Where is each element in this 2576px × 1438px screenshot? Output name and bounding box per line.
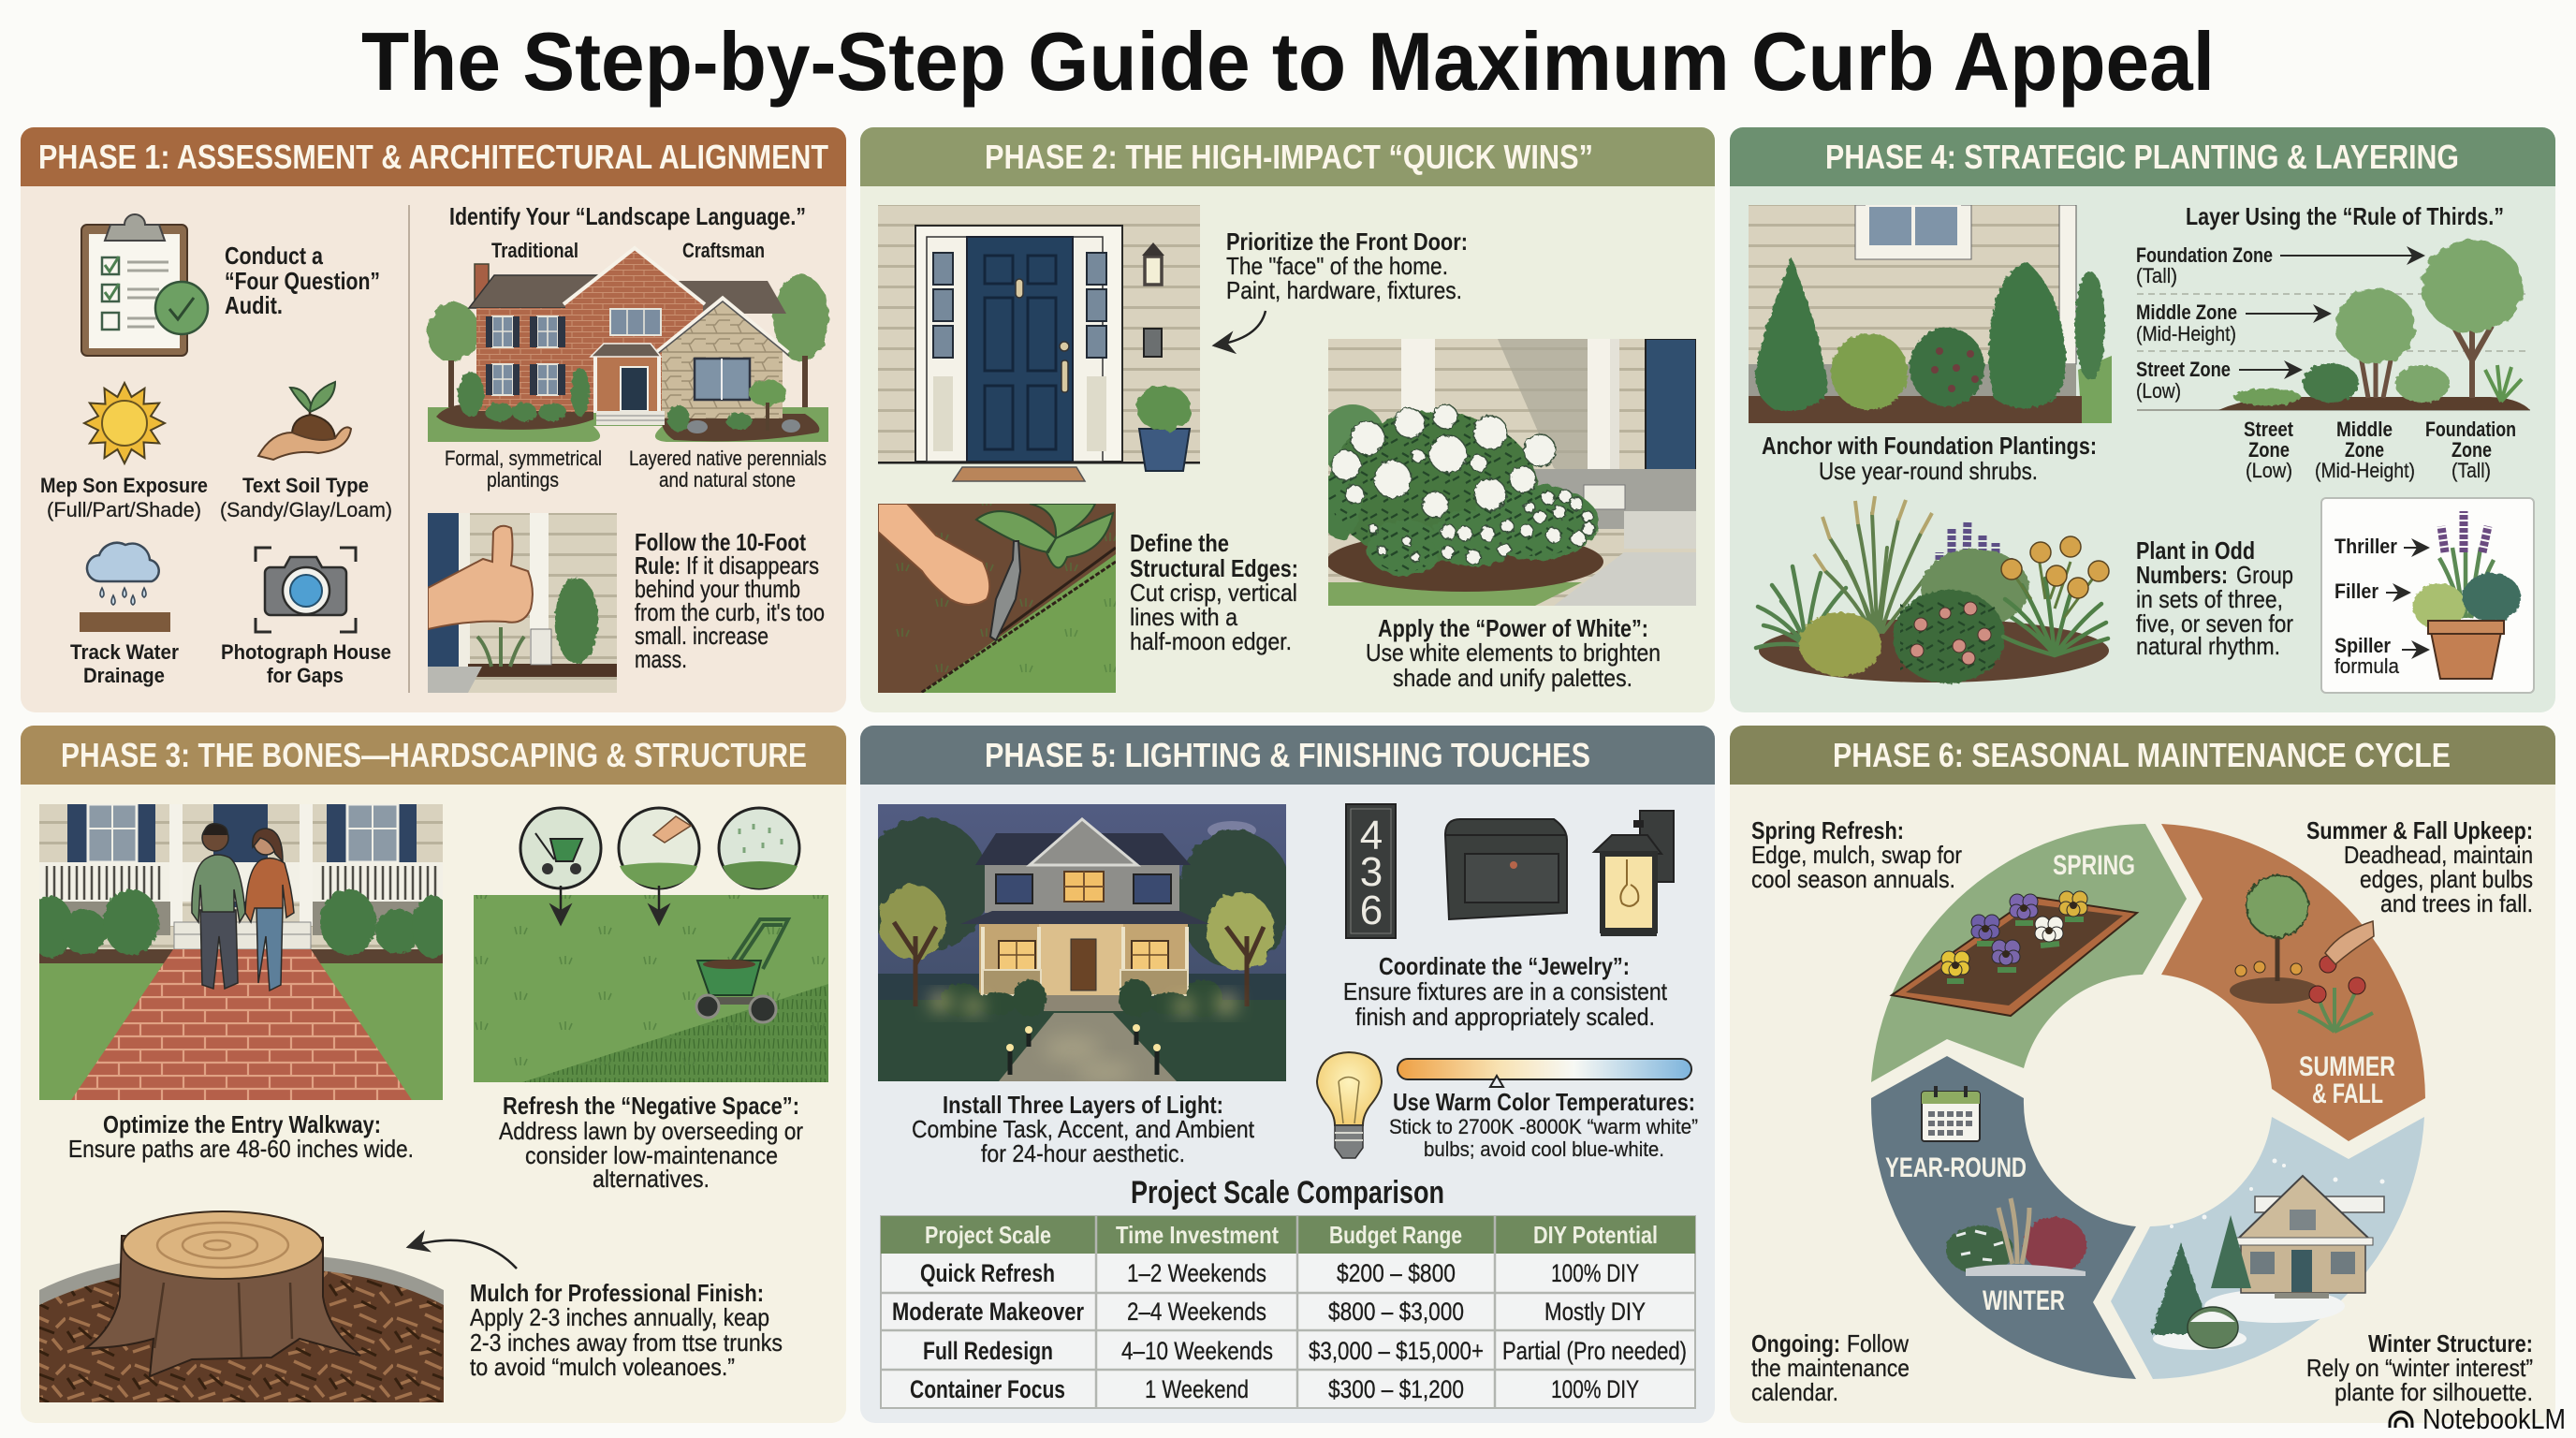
text: sun exposure <box>40 474 208 521</box>
text: three layers: Install Three Layers of Light: <box>943 1091 1223 1119</box>
panel: phase 1 assessment <box>21 127 846 712</box>
text: spring refresh: cool season annuals. <box>1751 865 1955 893</box>
text: mulch finish: Mulch for Professional Finish: <box>470 1279 764 1307</box>
text: audit: Audit. <box>225 291 283 319</box>
icon: house number plaque: 6 <box>1360 888 1383 933</box>
segment: summer and fall <box>2161 824 2425 1141</box>
phase 1 header: PHASE 1: ASSESSMENT & ARCHITECTURAL ALIGNMENT <box>38 138 828 176</box>
illustration: front door <box>878 205 1200 481</box>
text: summer and fall upkeep: and trees in fall. <box>2380 889 2533 917</box>
text: negative space <box>499 1092 803 1193</box>
text: winter structure: plante for silhouette. <box>2334 1378 2533 1406</box>
text: odd numbers: Plant in Odd <box>2136 536 2255 565</box>
table: project scale comparison: $3,000 – $15,000+ <box>1309 1337 1484 1365</box>
text: drainage: Drainage <box>83 664 165 687</box>
text: summer and fall upkeep: edges, plant bulbs <box>2360 865 2533 893</box>
text: entry walkway <box>68 1110 414 1163</box>
illustration: foundation shrubs <box>1749 205 2112 423</box>
text: winter structure: Rely on “winter interest” <box>2306 1354 2533 1382</box>
text: 10-foot rule <box>635 528 825 673</box>
table: project scale comparison: Budget Range <box>1329 1221 1462 1249</box>
text: soil type: Text Soil Type <box>242 474 369 497</box>
panel: phase 5 lighting <box>858 726 1715 1423</box>
panel: phase 6 seasonal cycle <box>1730 726 2555 1423</box>
phase 6 header <box>1730 726 2555 785</box>
labels: zone names left: Street Zone <box>2136 358 2231 381</box>
text: ongoing <box>1751 1329 1910 1406</box>
text: drainage <box>70 640 179 687</box>
text: mulch finish: to avoid “mulch voleanoes.” <box>470 1353 735 1381</box>
text: front door: Paint, hardware, fixtures. <box>1226 276 1462 304</box>
text: power of white <box>1366 614 1661 692</box>
text: front door: Prioritize the Front Door: <box>1226 227 1468 256</box>
text: spring refresh: Spring Refresh: <box>1751 816 1904 844</box>
text: drainage: Track Water <box>70 640 179 664</box>
callout: thriller filler spiller <box>2321 498 2534 693</box>
segment: year-round: WINTER <box>1983 1285 2065 1316</box>
segment: summer and fall: & FALL <box>2312 1078 2383 1109</box>
caption: layered: and natural stone <box>659 468 796 492</box>
label: craftsman: Craftsman <box>682 239 765 262</box>
text: soil type <box>220 474 392 521</box>
text: 10-foot rule: Rule: <box>635 551 681 580</box>
text: structural edges: Define the <box>1130 529 1229 557</box>
text: warm colour temperatures: bulbs; avoid cool blue-white. <box>1424 1137 1664 1161</box>
labels: zone names left: Foundation Zone <box>2136 243 2273 267</box>
labels: zone names below: (Tall) <box>2452 459 2491 482</box>
text: soil type: (Sandy/Glay/Loam) <box>220 498 392 521</box>
icon: camera <box>256 548 356 632</box>
phase 4 header: PHASE 4: STRATEGIC PLANTING & LAYERING <box>1825 138 2459 176</box>
segment: spring <box>1871 824 2187 1082</box>
text: odd numbers: in sets of three, <box>2136 585 2283 613</box>
text: negative space: Address lawn by overseeding or <box>499 1117 803 1145</box>
text: ongoing: Follow <box>1847 1329 1909 1357</box>
text: front door: The "face" of the home. <box>1226 252 1448 280</box>
diagram: rule of thirds zones <box>2137 240 2530 410</box>
text: spring refresh <box>1751 816 1962 893</box>
text: photograph: Photograph House <box>221 640 391 664</box>
heading: rule of thirds: Layer Using the “Rule of Thirds.” <box>2186 202 2504 230</box>
panel: phase 2 quick wins <box>860 127 1715 712</box>
phase 5 header <box>860 726 1715 785</box>
text: entry walkway: Ensure paths are 48-60 inches wide. <box>68 1135 414 1163</box>
text: mulch finish <box>470 1279 783 1381</box>
text: three layers: for 24-hour aesthetic. <box>981 1139 1185 1167</box>
table: project scale comparison: DIY Potential <box>1533 1221 1658 1249</box>
text: structural edges <box>1130 529 1298 655</box>
text: audit: “Four Question” <box>225 267 380 295</box>
text: audit: Conduct a <box>225 242 323 270</box>
caption: layered: Layered native perennials <box>629 447 827 470</box>
text: front door <box>1226 227 1468 304</box>
labels: zone names below: Zone <box>2248 438 2290 462</box>
icon: mailbox <box>1445 819 1567 919</box>
text: odd numbers: Group <box>2236 561 2293 589</box>
text: warm colour temperatures <box>1389 1088 1698 1161</box>
labels: zone names left: Middle Zone <box>2136 301 2237 324</box>
icon: soil in hand <box>258 382 351 460</box>
text: 10-foot rule: If it disappears <box>686 551 819 580</box>
icon: clipboard audit <box>81 214 208 356</box>
callout: thriller filler spiller: Thriller <box>2334 535 2397 558</box>
phase 5 header: PHASE 5: LIGHTING & FINISHING TOUCHES <box>985 736 1590 774</box>
text: power of white: Use white elements to brighten <box>1366 638 1661 667</box>
heading: project scale comparison: Project Scale Comparison <box>1131 1175 1444 1211</box>
labels: zone names left <box>2136 243 2273 403</box>
illustration: stump with mulch <box>39 1211 444 1402</box>
text: jewelry: finish and appropriately scaled. <box>1355 1003 1655 1031</box>
table: project scale comparison: 4–10 Weekends <box>1121 1337 1273 1365</box>
segment: spring: SPRING <box>2053 850 2135 881</box>
illustration: thumb test <box>428 513 617 693</box>
callout: thriller filler spiller: Filler <box>2334 580 2378 603</box>
heading: landscape language: Identify Your “Landscape Language.” <box>449 202 806 230</box>
text: audit <box>225 242 380 319</box>
table: project scale comparison: Time Investment <box>1116 1221 1279 1249</box>
table: project scale comparison: Mostly DIY <box>1544 1298 1646 1326</box>
title: The Step-by-Step Guide to Maximum Curb Appeal <box>361 15 2215 108</box>
icon: sun <box>84 383 165 463</box>
table: project scale comparison <box>881 1216 1695 1408</box>
phase 2 header: PHASE 2: THE HIGH-IMPACT “QUICK WINS” <box>985 138 1593 176</box>
labels: zone names below: Middle <box>2336 418 2393 441</box>
phase 6 header: PHASE 6: SEASONAL MAINTENANCE CYCLE <box>1833 736 2451 774</box>
illustration: brick walkway with couple <box>39 804 443 1100</box>
segment: year-round: YEAR-ROUND <box>1885 1152 2027 1183</box>
text: odd numbers <box>2136 536 2293 660</box>
text: 10-foot rule: Follow the 10-Foot <box>635 528 806 556</box>
labels: zone names below: Foundation <box>2425 418 2516 441</box>
text: power of white: shade and unify palettes. <box>1393 664 1632 692</box>
phase 2 header <box>860 127 1715 186</box>
label: traditional: Traditional <box>491 239 578 262</box>
caption: formal <box>445 447 602 492</box>
panel: phase 3 hardscaping <box>21 726 846 1423</box>
table: project scale comparison: Project Scale <box>925 1221 1051 1249</box>
table: project scale comparison: 2–4 Weekends <box>1127 1298 1266 1326</box>
text: photograph: for Gaps <box>267 664 344 687</box>
icon: house number plaque: 4 <box>1360 813 1383 858</box>
phase 4 header <box>1730 127 2555 186</box>
text: 10-foot rule: from the curb, it's too <box>635 598 825 626</box>
phase 3 header: PHASE 3: THE BONES—HARDSCAPING & STRUCTURE <box>61 736 807 774</box>
text: summer and fall upkeep <box>2306 816 2533 917</box>
icon: rain cloud over soil <box>80 543 170 632</box>
illustration: overseeding lawn <box>474 895 828 1082</box>
text: ongoing: Ongoing: <box>1751 1329 1840 1357</box>
text: structural edges: lines with a <box>1130 603 1237 631</box>
text: ongoing: calendar. <box>1751 1378 1838 1406</box>
text: jewelry <box>1343 952 1668 1031</box>
table: project scale comparison: Moderate Makeover <box>892 1298 1084 1326</box>
chart: colour temperature bar <box>1398 1059 1691 1087</box>
text: entry walkway: Optimize the Entry Walkway: <box>103 1110 381 1138</box>
callout: thriller filler spiller: formula <box>2334 654 2399 678</box>
text: odd numbers: five, or seven for <box>2136 609 2293 638</box>
text: foundation plantings <box>1762 432 2097 485</box>
labels: zone names left: (Mid-Height) <box>2136 322 2236 345</box>
text: foundation plantings: Use year-round shrubs. <box>1819 457 2038 485</box>
icons: overseeding steps <box>520 808 799 924</box>
text: jewelry: Ensure fixtures are in a consistent <box>1343 977 1668 1005</box>
panel: phase 4 planting <box>1730 127 2555 712</box>
text: negative space: alternatives. <box>593 1165 710 1193</box>
text: odd numbers: natural rhythm. <box>2136 632 2280 660</box>
illustration: odd-numbered planting bed <box>1756 496 2109 683</box>
icon: wall lantern <box>1594 811 1674 936</box>
text: winter structure <box>2306 1329 2533 1406</box>
table: project scale comparison: 1–2 Weekends <box>1127 1259 1266 1287</box>
text: winter structure: Winter Structure: <box>2368 1329 2533 1357</box>
icon: light bulb <box>1317 1052 1382 1158</box>
text: warm colour temperatures: Use Warm Color Temperatures: <box>1393 1088 1695 1116</box>
table: project scale comparison: Container Focus <box>910 1375 1065 1403</box>
table: project scale comparison: 1 Weekend <box>1145 1375 1249 1403</box>
table: project scale comparison: Full Redesign <box>923 1337 1053 1365</box>
icon: house number plaque: 3 <box>1360 849 1383 895</box>
table: project scale comparison: $300 – $1,200 <box>1328 1375 1464 1403</box>
text: sun exposure: (Full/Part/Shade) <box>47 498 201 521</box>
labels: zone names below: (Mid-Height) <box>2315 459 2415 482</box>
caption: formal: plantings <box>487 468 559 492</box>
text: mulch finish: Apply 2-3 inches annually, keap <box>470 1303 769 1331</box>
text: negative space: consider low-maintenance <box>525 1141 778 1169</box>
text: 10-foot rule: small. increase <box>635 622 768 650</box>
text: negative space: Refresh the “Negative Space”: <box>503 1092 799 1120</box>
table: project scale comparison: $200 – $800 <box>1337 1259 1456 1287</box>
labels: zone names below: Zone <box>2345 438 2384 462</box>
illustration: white hydrangeas <box>1328 339 1696 606</box>
illustration: half-moon edger <box>878 504 1116 693</box>
text: spring refresh: Edge, mulch, swap for <box>1751 841 1962 869</box>
arrow: to mulch <box>408 1240 517 1269</box>
text: 10-foot rule: mass. <box>635 645 687 673</box>
segment: summer and fall: SUMMER <box>2299 1051 2395 1082</box>
text: photograph <box>221 640 391 687</box>
text: warm colour temperatures: Stick to 2700K -8000K “warm white” <box>1389 1115 1698 1138</box>
callout: thriller filler spiller: Spiller <box>2334 634 2391 657</box>
text: structural edges: half-moon edger. <box>1130 627 1292 655</box>
text: summer and fall upkeep: Deadhead, maintain <box>2344 841 2533 869</box>
text: odd numbers: Numbers: <box>2136 561 2228 589</box>
phase 1 header <box>21 127 846 186</box>
labels: zone names left: (Low) <box>2136 379 2181 403</box>
text: 10-foot rule: behind your thumb <box>635 575 800 603</box>
text: jewelry: Coordinate the “Jewelry”: <box>1379 952 1630 980</box>
segment: winter <box>2111 1117 2424 1379</box>
illustration: house at night <box>878 804 1286 1081</box>
text: structural edges: Cut crisp, vertical <box>1130 579 1297 607</box>
text: mulch finish: 2-3 inches away from ttse trunks <box>470 1328 783 1357</box>
labels: zone names left: (Tall) <box>2136 264 2177 287</box>
labels: zone names below: (Low) <box>2246 459 2292 482</box>
text: ongoing: the maintenance <box>1751 1354 1910 1382</box>
text: three layers <box>912 1091 1255 1167</box>
labels: zone names below: Zone <box>2452 438 2492 462</box>
table: project scale comparison: Partial (Pro needed) <box>1502 1337 1687 1365</box>
segment: year-round <box>1871 1056 2136 1379</box>
text: summer and fall upkeep: Summer & Fall Upkeep: <box>2306 816 2533 844</box>
labels: zone names below: Street <box>2244 418 2293 441</box>
text: three layers: Combine Task, Accent, and Ambient <box>912 1115 1255 1143</box>
table: project scale comparison: Quick Refresh <box>920 1259 1055 1287</box>
text: sun exposure: Mep Son Exposure <box>40 474 208 497</box>
table: project scale comparison: 100% DIY <box>1551 1259 1639 1287</box>
text: power of white: Apply the “Power of White”: <box>1378 614 1648 642</box>
illustration: traditional and craftsman house <box>427 248 829 442</box>
labels: zone names below <box>2244 418 2516 482</box>
caption: formal: Formal, symmetrical <box>445 447 602 470</box>
phase 3 header <box>21 726 846 785</box>
caption: layered <box>629 447 827 492</box>
text: structural edges: Structural Edges: <box>1130 554 1298 582</box>
icon: house number plaque <box>1346 804 1396 938</box>
arrow: to door <box>1214 311 1266 345</box>
text: foundation plantings: Anchor with Foundation Plantings: <box>1762 432 2097 460</box>
table: project scale comparison: 100% DIY <box>1551 1375 1639 1403</box>
table: project scale comparison: $800 – $3,000 <box>1328 1298 1464 1326</box>
